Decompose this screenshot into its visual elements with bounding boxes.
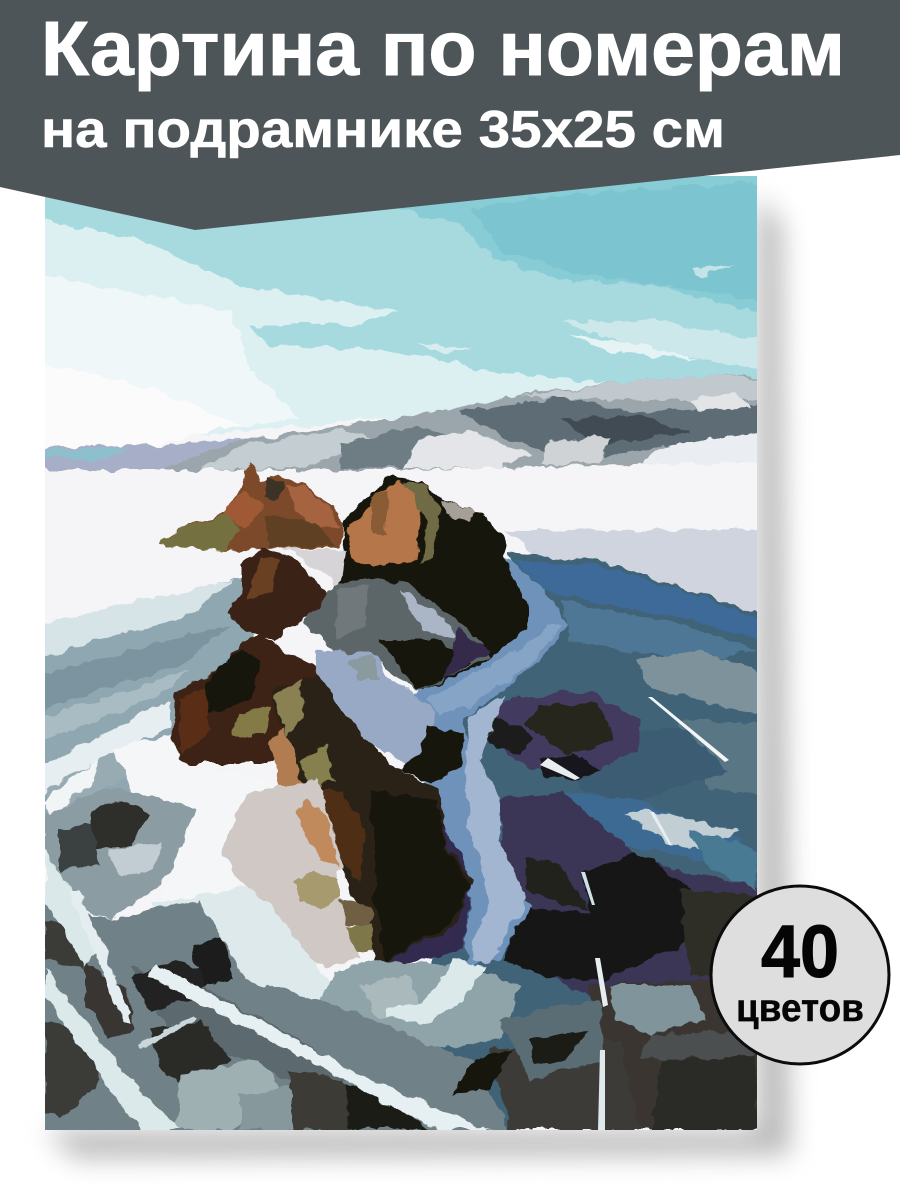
subtitle: на подрамнике 35х25 см <box>41 101 725 159</box>
canvas shadow <box>45 195 790 1158</box>
painting snow reflection and shore <box>45 733 520 1050</box>
header banner <box>0 0 900 230</box>
painting: frozen lake with rocks <box>45 176 757 1130</box>
painting white cracks on dark ice <box>540 697 729 1130</box>
painting mountains <box>20 375 790 470</box>
badge: 40 colours <box>711 886 889 1064</box>
badge number: 40 <box>761 910 839 993</box>
painting winding ice path <box>380 550 566 968</box>
badge label: цветов <box>736 987 864 1030</box>
painting sky <box>45 176 757 436</box>
painting rocks <box>159 462 529 965</box>
painting blue ice, right side <box>430 530 790 1130</box>
painting cracked foreground ice <box>45 848 610 1130</box>
painting ice, left band <box>45 578 254 814</box>
title: Картина по номерам <box>41 6 845 92</box>
